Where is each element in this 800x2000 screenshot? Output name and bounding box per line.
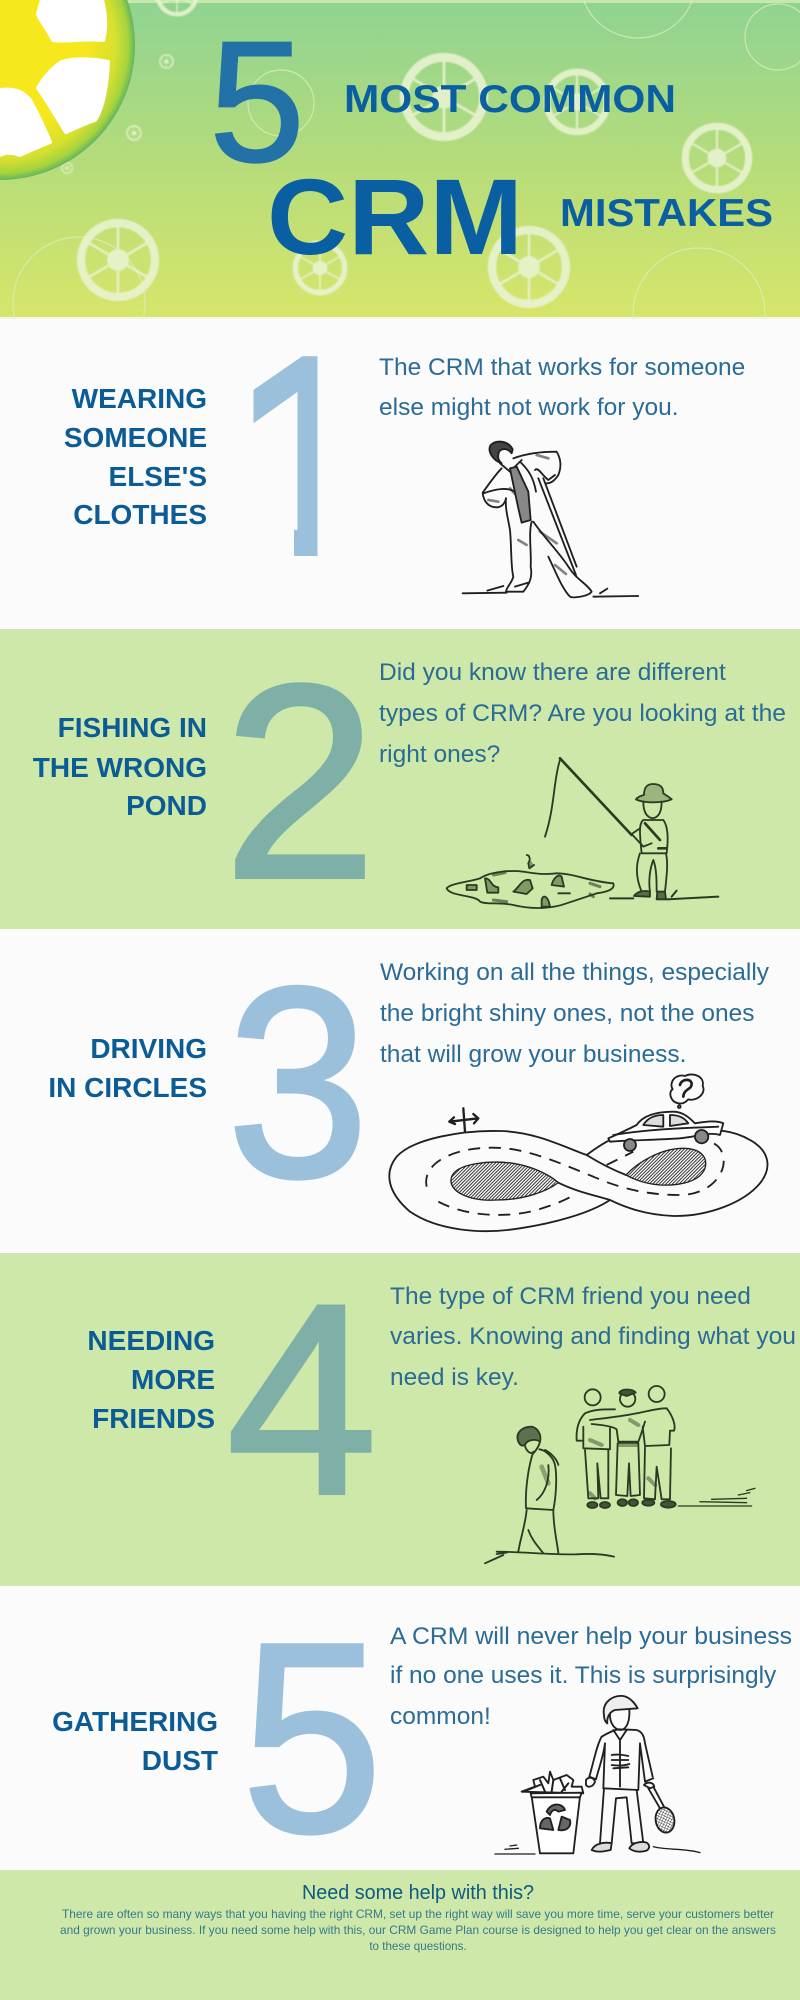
- heading: gathering dust: DUST: [142, 1745, 218, 1776]
- text block: else might not work for you.: [379, 394, 679, 421]
- panel: mistake 5: [0, 1586, 800, 1889]
- text block: common!: [390, 1703, 491, 1730]
- heading: wearing someone else's clothes: WEARING: [72, 383, 207, 414]
- text block: Did you know there are different: [379, 659, 726, 686]
- decorative outline circles: [13, 0, 800, 380]
- footer text: to these questions.: [369, 1940, 467, 1953]
- heading: needing more friends: MORE: [131, 1364, 215, 1395]
- text block: need is key.: [390, 1364, 519, 1391]
- heading: driving in circles: DRIVING: [90, 1033, 207, 1064]
- heading: wearing someone else's clothes: SOMEONE: [64, 422, 207, 453]
- heading: fishing in the wrong pond: POND: [126, 790, 207, 821]
- heading: fishing in the wrong pond: THE WRONG: [33, 752, 207, 783]
- illustration: man in baggy clothes: [463, 442, 638, 597]
- text block: the bright shiny ones, not the ones: [380, 1000, 755, 1027]
- number 1: 1: [230, 299, 388, 615]
- panel: header: [0, 0, 800, 380]
- panel: mistake 3: [0, 929, 800, 1253]
- illustration: lonely man and three friends: [485, 1386, 755, 1563]
- text block: The CRM that works for someone: [379, 354, 745, 381]
- text block: right ones?: [379, 741, 500, 768]
- heading: fishing in the wrong pond: FISHING IN: [58, 712, 207, 743]
- text block: if no one uses it. This is surprisingly: [390, 1662, 777, 1689]
- heading: driving in circles: IN CIRCLES: [48, 1072, 207, 1103]
- illustration: man beside a recycling bin: [495, 1696, 700, 1854]
- heading: wearing someone else's clothes: ELSE'S: [109, 461, 207, 492]
- number 4: 4: [227, 1249, 377, 1551]
- text block: Working on all the things, especially: [380, 959, 770, 986]
- panel: mistake 1: [14, 319, 766, 598]
- panel: mistake 4: [0, 1249, 800, 1586]
- heading: needing more friends: NEEDING: [87, 1325, 215, 1356]
- decorative wheels: [62, 0, 749, 304]
- heading: gathering dust: GATHERING: [52, 1706, 218, 1737]
- heading: wearing someone else's clothes: CLOTHES: [73, 499, 207, 530]
- title: 5: 5: [209, 6, 305, 198]
- illustration: infinity road with car: [389, 1074, 767, 1231]
- text block: varies. Knowing and finding what you: [390, 1323, 796, 1350]
- title: mistakes: MISTAKES: [560, 192, 773, 235]
- number 3: 3: [227, 932, 369, 1234]
- panel: mistake 2: [0, 628, 800, 936]
- title: CRM: CRM: [267, 156, 523, 277]
- panel: footer call to action: [0, 1870, 800, 2000]
- text block: The type of CRM friend you need: [390, 1283, 751, 1310]
- footer heading: Need some help with this?: [302, 1882, 534, 1904]
- footer text: There are often so many ways that you having the right CRM, set up the right way will save you more time, serve your customers better: [62, 1908, 774, 1921]
- text block: that will grow your business.: [380, 1041, 686, 1068]
- illustration: fisherman at a pond: [447, 758, 718, 908]
- text block: A CRM will never help your business: [390, 1623, 792, 1650]
- heading: needing more friends: FRIENDS: [92, 1403, 215, 1434]
- text block: types of CRM? Are you looking at the: [379, 700, 786, 727]
- icon: yellow wheel: [0, 0, 135, 180]
- title: most common: MOST COMMON: [344, 78, 676, 121]
- footer text: and grown your business. If you need some help with this, our CRM Game Plan course is designed to help you get clear on the answers: [60, 1924, 776, 1937]
- number 2: 2: [223, 628, 377, 936]
- number 5: 5: [242, 1588, 382, 1889]
